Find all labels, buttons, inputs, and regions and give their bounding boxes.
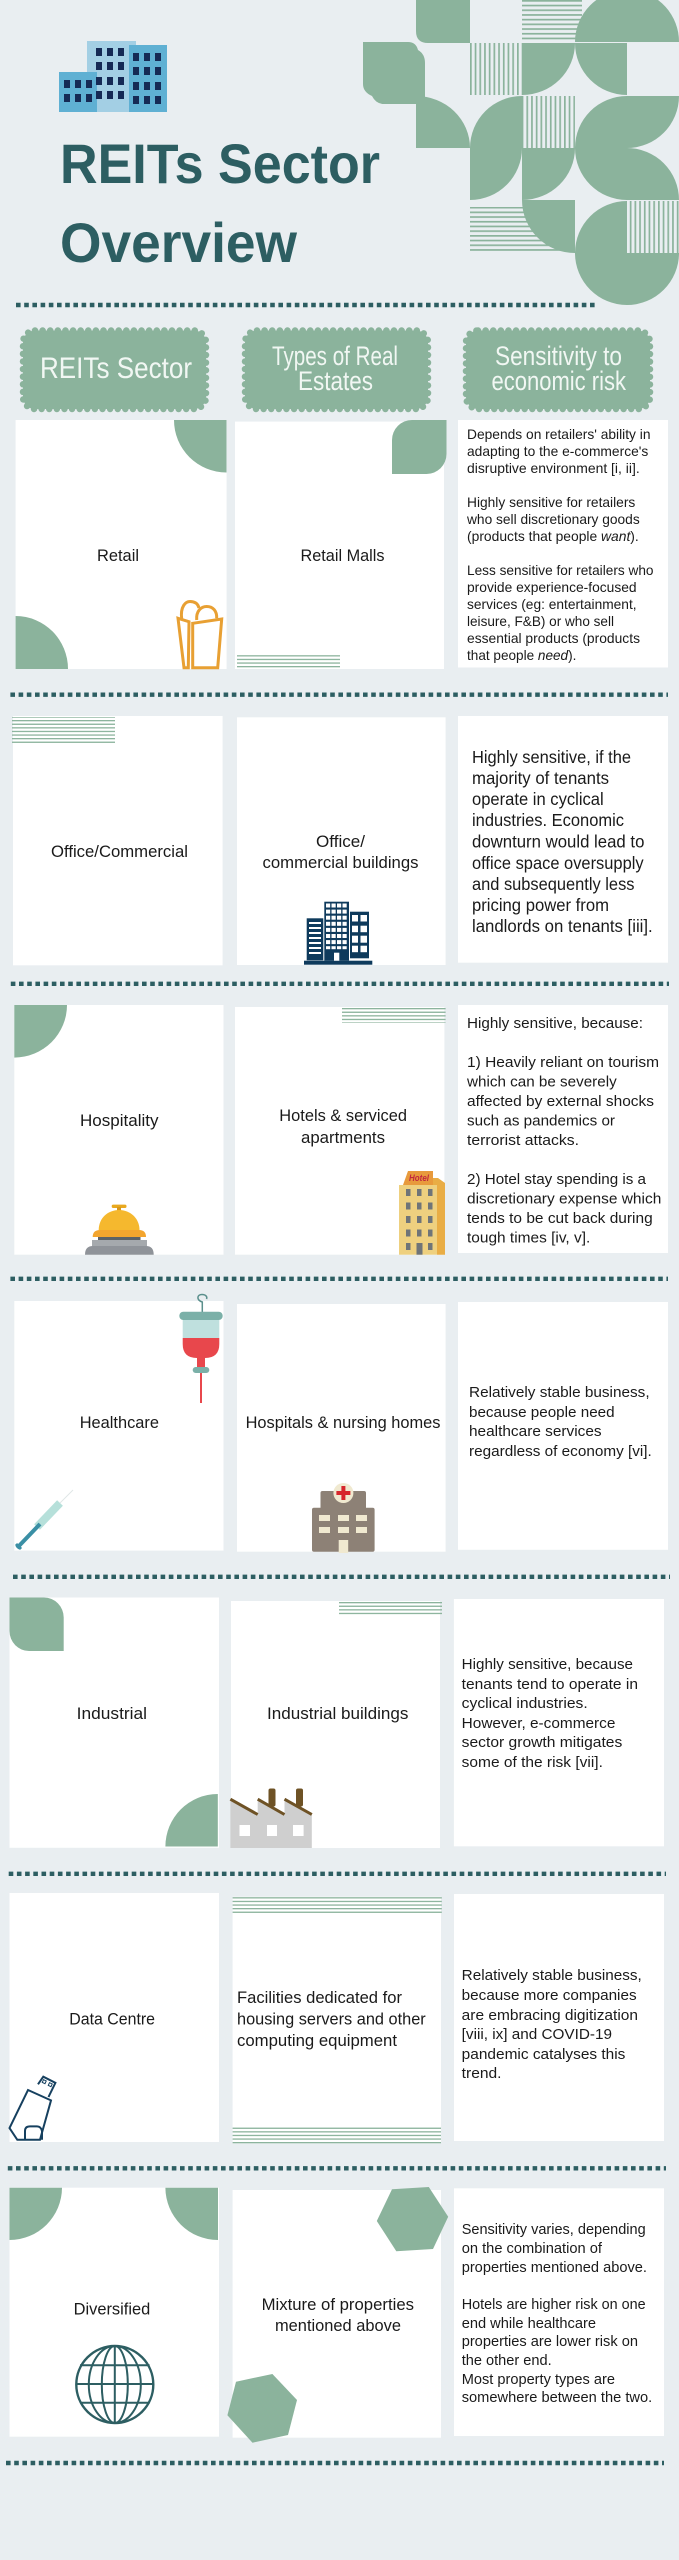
- panel: Data Centre sensitivity: are embracing digitization: [462, 2007, 638, 2024]
- icon: hospital: [312, 1483, 375, 1553]
- panel: Healthcare sensitivity: Relatively stable business,: [469, 1384, 650, 1401]
- panel: Office property type: Office/: [316, 833, 365, 851]
- panel: Hospitality sensitivity: discretionary expense which: [467, 1190, 661, 1208]
- panel: Retail sensitivity: (products that people want).: [467, 529, 639, 544]
- panel: Diversified sensitivity: Most property types are: [462, 2371, 615, 2388]
- panel: Industrial sensitivity: sector growth mitigates: [462, 1734, 622, 1751]
- panel: Data Centre sensitivity: [viii, ix] and COVID-19: [462, 2026, 612, 2043]
- title: Overview: [60, 211, 297, 274]
- panel: Diversified sensitivity: Hotels are higher risk on one: [462, 2296, 646, 2313]
- panel: Diversified property type: [227, 2187, 448, 2443]
- panel: Retail sector: [16, 420, 227, 669]
- panel: Office sensitivity: majority of tenants: [472, 768, 609, 788]
- heading: Sensitivity to economic risk: Sensitivity to: [495, 341, 622, 371]
- panel: Office sensitivity: industries. Economic: [472, 810, 624, 830]
- icon: factory: [230, 1788, 312, 1848]
- panel: Hospitality sensitivity: Highly sensitive, because:: [467, 1015, 643, 1032]
- panel: Office sensitivity: downturn would lead to: [472, 832, 644, 852]
- heading: REITs Sector: [23, 330, 206, 409]
- panel: Retail sensitivity: provide experience-focused: [467, 580, 637, 595]
- panel: Data Centre property type: housing servers and other: [237, 2010, 426, 2028]
- panel: Data Centre sensitivity: [454, 1894, 664, 2141]
- panel: Diversified property type: mentioned above: [275, 2317, 401, 2335]
- panel: Diversified sensitivity: on the combination of: [462, 2240, 603, 2257]
- panel: Data Centre sector: [10, 1893, 219, 2142]
- panel: Diversified sensitivity: [454, 2188, 664, 2436]
- panel: Retail sensitivity: adapting to the e-commerce's: [467, 444, 648, 459]
- panel: Office sensitivity: operate in cyclical: [472, 789, 604, 809]
- decorative geometric pattern: [363, 0, 679, 305]
- panel: Healthcare sensitivity: because people need: [469, 1404, 615, 1421]
- panel: Office property type: commercial buildings: [262, 854, 418, 872]
- panel: Diversified sensitivity: properties are lower risk on: [462, 2333, 638, 2350]
- panel: Data Centre sensitivity: Relatively stable business,: [462, 1967, 642, 1984]
- title: REITs Sector: [60, 132, 380, 195]
- panel: Data Centre property type: [233, 1896, 442, 2144]
- panel: Data Centre sensitivity: pandemic catalyses this: [462, 2046, 625, 2063]
- panel: Retail sensitivity: essential products (products: [467, 631, 640, 646]
- panel: Retail sensitivity: services (eg: entertainment,: [467, 597, 637, 612]
- panel: Hospitality sensitivity: tough times [iv, v].: [467, 1230, 590, 1246]
- panel: Healthcare property type: [237, 1304, 446, 1553]
- panel: Data Centre sensitivity: trend.: [462, 2065, 502, 2082]
- panel: Office property type: [237, 717, 446, 965]
- panel: Hospitality sensitivity: 1) Heavily reliant on tourism: [467, 1054, 659, 1071]
- panel: Hospitality sensitivity: [458, 1005, 668, 1253]
- panel: Industrial sensitivity: [454, 1599, 664, 1846]
- panel: Office sector: Office/Commercial: [51, 843, 188, 861]
- panel: Retail sensitivity: [458, 420, 668, 668]
- panel: Diversified property type: Mixture of properties: [262, 2296, 414, 2314]
- panel: Retail sensitivity: that people need).: [467, 648, 576, 663]
- panel: Office sensitivity: and subsequently less: [472, 874, 634, 894]
- panel: Healthcare property type: Hospitals & nursing homes: [246, 1414, 440, 1432]
- panel: Retail sensitivity: disruptive environment [i, ii].: [467, 461, 640, 476]
- panel: Data Centre sector: Data Centre: [69, 2010, 155, 2028]
- panel: Industrial sector: Industrial: [77, 1705, 147, 1723]
- panel: Diversified sensitivity: the other end.: [462, 2352, 552, 2369]
- panel: Diversified sector: [10, 2188, 219, 2437]
- panel: Hospitality sector: Hospitality: [80, 1112, 159, 1130]
- icon: office buildings: [59, 41, 167, 112]
- panel: Hospitality property type: Hotels & serviced: [279, 1107, 407, 1125]
- title: [60, 132, 380, 274]
- icon: hotel building: Hotel: [409, 1173, 429, 1183]
- panel: Data Centre property type: computing equipment: [237, 2032, 397, 2050]
- icon: office tower: [304, 902, 372, 965]
- panel: Office sensitivity: Highly sensitive, if the: [472, 747, 631, 767]
- heading: Sensitivity to economic risk: [466, 330, 650, 409]
- panel: Office sensitivity: pricing power from: [472, 895, 609, 915]
- icon: reception bell: [85, 1205, 154, 1255]
- panel: Hospitality property type: [235, 1007, 446, 1255]
- panel: Office sensitivity: [458, 716, 668, 963]
- heading: Types of Real Estates: Estates: [298, 366, 373, 396]
- panel: Diversified sensitivity: end while healthcare: [462, 2315, 596, 2332]
- panel: Office sector: [12, 716, 223, 965]
- panel: Retail sector: Retail: [97, 547, 139, 565]
- panel: Industrial property type: [230, 1600, 442, 1848]
- panel: Industrial sensitivity: Highly sensitive, because: [462, 1656, 633, 1673]
- icon: shopping bag: [178, 602, 222, 668]
- heading: Types of Real Estates: Types of Real: [272, 341, 398, 371]
- panel: Hospitality sensitivity: terrorist attacks.: [467, 1132, 579, 1149]
- panel: Industrial sensitivity: cyclical industries.: [462, 1695, 588, 1712]
- panel: Hospitality sensitivity: tends to be cut back during: [467, 1210, 653, 1227]
- panel: Retail property type: [235, 420, 446, 669]
- panel: Industrial sensitivity: However, e-commerce: [462, 1715, 615, 1732]
- panel: Diversified sector: Diversified: [74, 2300, 150, 2318]
- panel: Retail sensitivity: Less sensitive for retailers who: [467, 563, 654, 578]
- icon: syringe: [16, 1490, 73, 1549]
- panel: Diversified sensitivity: somewhere between the two.: [462, 2389, 652, 2406]
- panel: Hospitality sector: [14, 1005, 223, 1255]
- panel: Retail sensitivity: leisure, F&B) or who sell: [467, 614, 614, 629]
- panel: Hospitality property type: apartments: [301, 1129, 385, 1147]
- panel: Retail sensitivity: who sell discretionary goods: [466, 512, 640, 527]
- panel: Retail property type: Retail Malls: [300, 547, 384, 565]
- panel: Healthcare sensitivity: [458, 1302, 668, 1550]
- heading: REITs Sector: REITs Sector: [40, 352, 192, 385]
- panel: Retail sensitivity: Highly sensitive for retailers: [467, 495, 635, 510]
- panel: Hospitality sensitivity: 2) Hotel stay spending is a: [467, 1171, 647, 1188]
- panel: Healthcare sector: Healthcare: [80, 1414, 159, 1432]
- heading: Sensitivity to economic risk: economic risk: [492, 366, 626, 396]
- icon: globe: [76, 2346, 153, 2423]
- panel: Industrial sensitivity: tenants tend to operate in: [462, 1676, 638, 1693]
- panel: Data Centre sensitivity: because more companies: [462, 1987, 637, 2004]
- panel: Diversified sensitivity: Sensitivity varies, depending: [462, 2221, 646, 2238]
- panel: Healthcare sensitivity: regardless of economy [vi].: [469, 1443, 652, 1460]
- panel: Industrial sensitivity: some of the risk [vii].: [462, 1754, 603, 1771]
- panel: Office sensitivity: landlords on tenants [iii].: [472, 916, 653, 936]
- icon: hotel building: [399, 1171, 445, 1255]
- panel: Retail sensitivity: Depends on retailers' ability in: [467, 427, 650, 442]
- icon: USB drive: [10, 2077, 55, 2140]
- panel: Healthcare sector: [14, 1294, 223, 1551]
- panel: Hospitality sensitivity: which can be severely: [466, 1074, 617, 1090]
- panel: Office sensitivity: office space oversupply: [472, 853, 644, 873]
- panel: Hospitality sensitivity: affected by external shocks: [467, 1093, 654, 1110]
- heading: Types of Real Estates: [245, 330, 428, 409]
- panel: Diversified sensitivity: properties mentioned above.: [462, 2259, 647, 2276]
- panel: Industrial property type: Industrial buildings: [267, 1705, 408, 1723]
- panel: Healthcare sensitivity: healthcare services: [469, 1423, 602, 1440]
- panel: Industrial sector: [10, 1598, 219, 1848]
- icon: IV drip bag: [179, 1294, 223, 1403]
- panel: Data Centre property type: Facilities dedicated for: [237, 1989, 402, 2007]
- panel: Hospitality sensitivity: such as pandemics or: [467, 1112, 615, 1130]
